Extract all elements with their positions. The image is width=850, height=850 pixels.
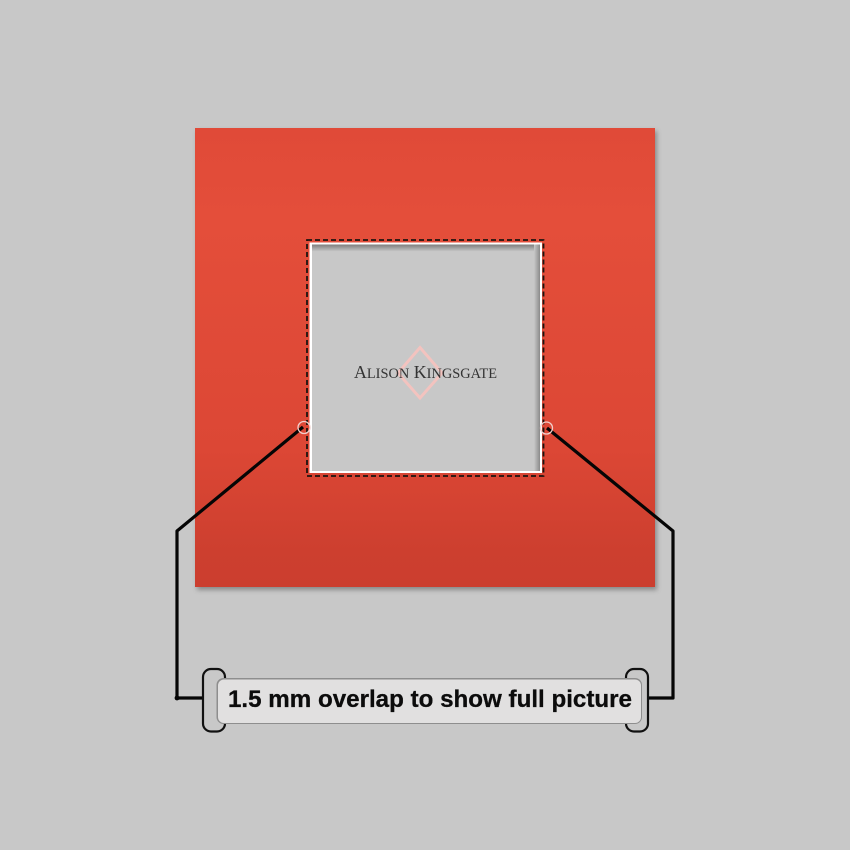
- icon: left bracket: [203, 669, 225, 732]
- panel: red mat board: [195, 128, 657, 590]
- arrow: right leader line: [540, 422, 673, 698]
- callout text: 1.5 mm overlap to show full picture: [228, 686, 632, 713]
- icon: right bracket: [626, 669, 648, 732]
- icon: left marker circle: [298, 422, 310, 434]
- logo: Alison Kingsgate: [354, 348, 497, 398]
- arrow: left leader line: [175, 422, 310, 700]
- callout label: [216, 678, 642, 724]
- icon: right marker circle: [540, 422, 552, 434]
- panel: window opening: [310, 242, 542, 473]
- logo wordmark: ALISON KINGSGATE: [354, 362, 497, 382]
- icon: pink diamond: [398, 348, 442, 398]
- dashed overlap outline: [307, 240, 544, 476]
